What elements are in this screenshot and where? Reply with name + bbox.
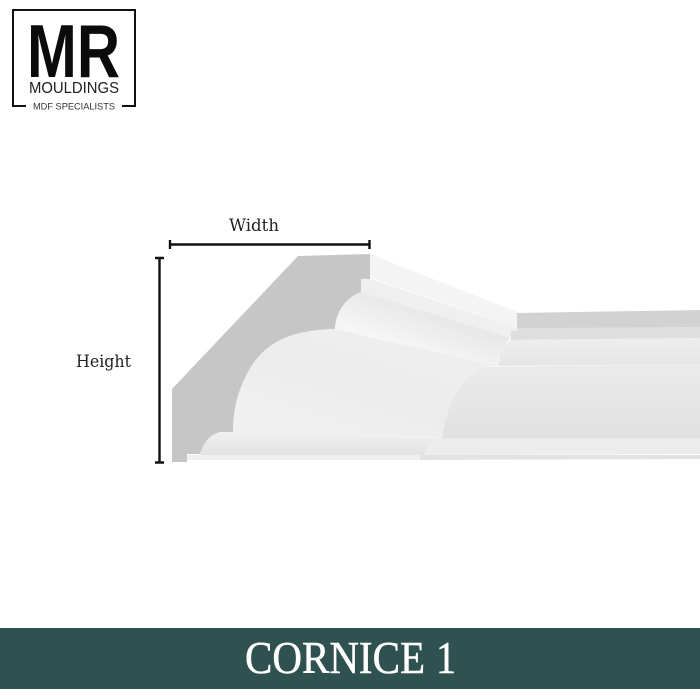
height label: Height	[76, 352, 131, 372]
right upper fillet	[511, 327, 700, 340]
logo wordmark: MOULDINGS	[29, 80, 119, 97]
left top fascia	[370, 254, 517, 328]
banner title: CORNICE	[245, 632, 425, 683]
title banner	[0, 628, 700, 689]
logo: MR Mouldings	[13, 9, 135, 112]
banner title: 1	[436, 632, 456, 683]
right large cove	[442, 364, 700, 438]
width label: Width	[229, 216, 279, 236]
left step	[361, 279, 517, 338]
right base strip	[418, 455, 700, 460]
width dimension arrow	[170, 240, 370, 249]
right lower fillet	[424, 438, 700, 455]
height dimension arrow	[155, 258, 164, 462]
left base strip	[187, 455, 420, 460]
logo tagline: MDF SPECIALISTS	[33, 102, 115, 112]
far wall return	[517, 310, 700, 329]
end-cut grey section	[172, 254, 370, 462]
banner background	[0, 628, 700, 689]
left large cove	[233, 329, 497, 438]
logo frame	[13, 10, 135, 106]
left upper cove	[335, 292, 511, 366]
right upper cove	[498, 338, 700, 366]
left lower bead	[200, 432, 432, 455]
logo letters MR: MR	[27, 9, 120, 93]
cornice moulding render	[172, 254, 700, 462]
